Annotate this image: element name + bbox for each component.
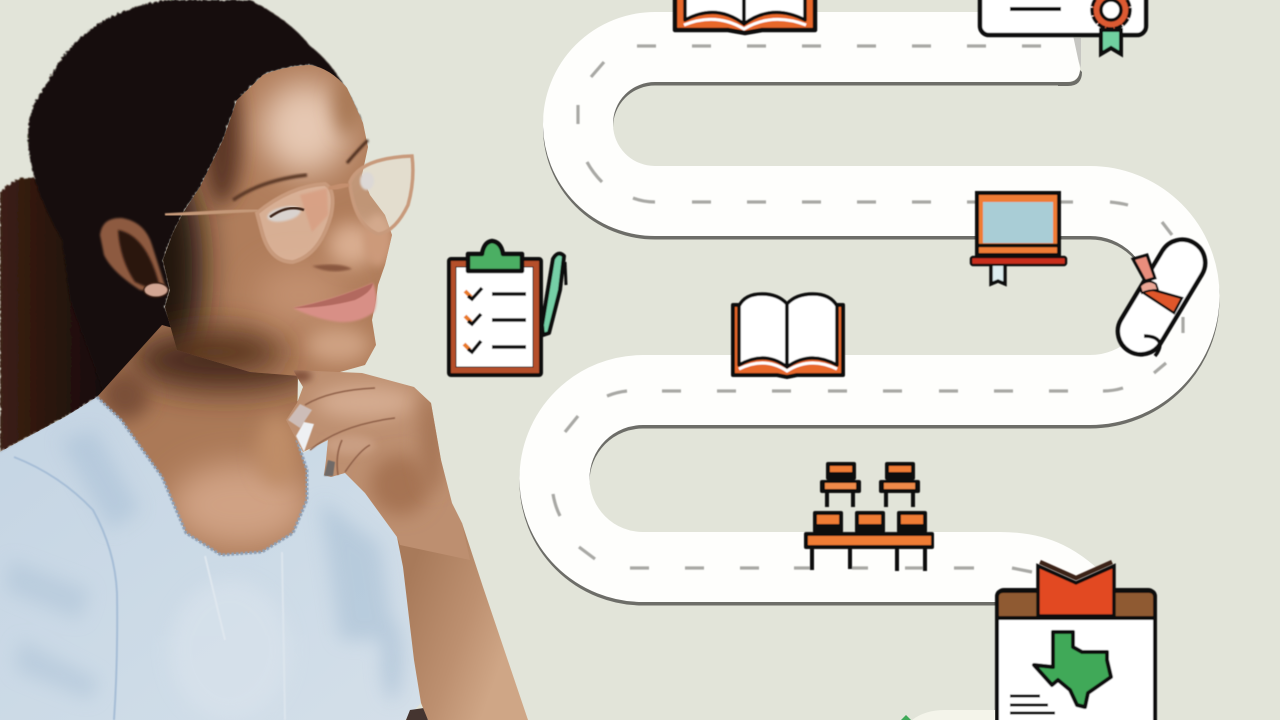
page layer <box>684 19 806 29</box>
left eye reflection <box>266 204 302 224</box>
left eye lashes <box>270 208 304 217</box>
pen <box>542 254 564 335</box>
page layer <box>739 363 837 371</box>
pen clip <box>565 262 566 285</box>
shirt seams <box>0 397 285 720</box>
face base <box>163 65 392 376</box>
right page <box>744 0 805 24</box>
earring <box>144 283 168 297</box>
card body <box>997 590 1155 720</box>
rosette <box>1092 0 1130 29</box>
temple arm <box>165 210 258 215</box>
check accents <box>464 291 471 350</box>
road end wedge <box>1058 12 1080 82</box>
shirt <box>0 380 430 720</box>
ear shadow <box>118 230 162 294</box>
icon: open book middle <box>733 294 843 377</box>
board back <box>449 259 541 375</box>
road centre dashes <box>553 46 1183 572</box>
left page <box>739 294 787 367</box>
rosette centre <box>1101 0 1121 20</box>
road end wedge shade <box>1070 38 1081 68</box>
red book <box>1038 566 1114 616</box>
ribbon tag <box>1133 255 1155 281</box>
certificate line <box>1010 7 1061 11</box>
icon: diploma scroll <box>1109 231 1214 363</box>
neck base <box>97 325 307 555</box>
board base <box>971 257 1066 265</box>
clip <box>468 241 522 271</box>
upper chair two seat <box>879 480 920 493</box>
neck shading <box>100 330 320 547</box>
table top <box>804 532 934 549</box>
upper chair two panel <box>889 466 911 472</box>
upper chair one seat <box>820 480 861 493</box>
board stand <box>991 266 1005 284</box>
upper chair two legs <box>886 493 913 507</box>
Texas map <box>1034 632 1111 707</box>
right page <box>787 294 837 367</box>
hand shading <box>288 370 444 515</box>
certificate sheet <box>980 0 1146 35</box>
finger lines <box>305 388 395 475</box>
road end shadow <box>1058 70 1082 86</box>
book cover <box>675 0 815 33</box>
bridge <box>329 184 349 189</box>
board screen <box>983 202 1053 243</box>
under-sleeve shadow <box>406 708 428 720</box>
lower chair panels <box>817 515 923 524</box>
shirt base <box>0 380 430 720</box>
road stub surface <box>912 710 995 720</box>
icon: certificate <box>980 0 1146 54</box>
upper lip <box>293 283 373 308</box>
lips <box>293 283 376 322</box>
right eye reflection <box>360 172 374 190</box>
ear <box>100 218 167 292</box>
icon: desks and chairs <box>804 462 934 571</box>
collar trim <box>97 397 307 555</box>
scroll body <box>1109 231 1214 363</box>
left lens upper tint <box>300 188 328 232</box>
scroll curl <box>1144 336 1160 356</box>
face <box>163 65 392 376</box>
card text lines <box>1010 696 1055 713</box>
eyebrow <box>233 175 307 200</box>
icon: Texas certification card <box>997 562 1155 720</box>
road shadow <box>554 50 1184 608</box>
card header <box>997 591 1155 618</box>
upper chair two cushion <box>884 483 915 489</box>
table legs <box>812 549 925 571</box>
upper chair one legs <box>827 493 853 507</box>
book pages <box>1040 562 1112 578</box>
person <box>0 0 528 720</box>
checks <box>468 288 482 352</box>
ponytail <box>0 178 178 452</box>
board frame <box>977 193 1059 255</box>
table surface <box>808 536 931 545</box>
right lens <box>350 156 413 234</box>
board ledge line <box>977 244 1059 247</box>
next road stub <box>901 710 995 720</box>
upper chair two back <box>885 462 915 480</box>
upper chair one <box>820 462 861 507</box>
paper <box>456 267 533 367</box>
upper chair one cushion <box>825 483 856 489</box>
ribbon <box>1101 30 1121 54</box>
second eyebrow <box>347 140 368 163</box>
upper chair two <box>879 462 920 507</box>
fingernails <box>288 404 335 476</box>
road surface <box>554 47 1184 605</box>
upper chair one panel <box>830 466 852 472</box>
hand <box>286 370 466 558</box>
list lines <box>492 294 526 347</box>
neck and chest <box>97 325 307 555</box>
arm <box>397 523 528 720</box>
lower chair backs <box>813 511 927 533</box>
ribbon band <box>1142 287 1182 313</box>
book cover <box>733 305 843 377</box>
left page <box>685 0 744 24</box>
glasses <box>165 156 413 262</box>
ribbon knot <box>1140 281 1158 293</box>
green icon tip <box>901 715 911 720</box>
hair <box>28 0 363 396</box>
icon: chalkboard <box>971 193 1066 284</box>
icon: open book top <box>675 0 815 33</box>
nose shadow <box>312 265 352 271</box>
upper chair one back <box>826 462 856 480</box>
shirt shading <box>5 430 402 720</box>
icon: clipboard <box>449 241 566 375</box>
hand base <box>286 370 466 558</box>
face shading <box>163 65 392 375</box>
left lens <box>257 184 333 262</box>
winding road <box>553 12 1184 608</box>
